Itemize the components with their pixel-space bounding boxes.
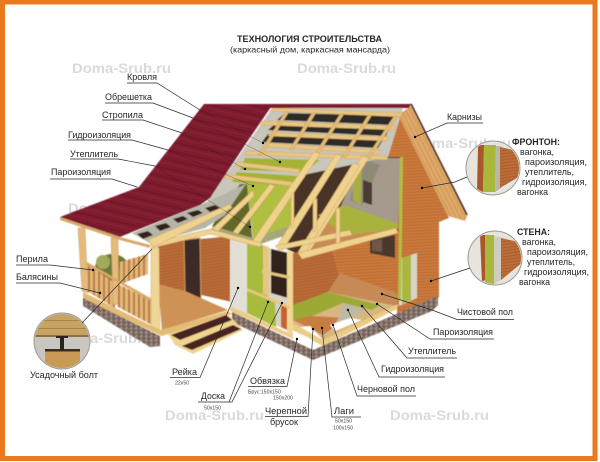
watermarks: Doma-Srub.ru: [68, 200, 167, 216]
label: Доска: [198, 301, 283, 412]
watermarks: Doma-Srub.ru: [297, 60, 396, 76]
text: Фронтон: вагонка: [517, 187, 548, 197]
text: Стена: СТЕНА:: [517, 227, 550, 237]
room walls: [293, 231, 397, 308]
label: Рейка: Рейка: [172, 367, 197, 377]
label: Лаги: Лаги: [334, 406, 354, 416]
label: Гидроизоляция: Гидроизоляция: [68, 130, 131, 140]
steps: [168, 314, 243, 354]
watermarks: Doma-Srub.ru: [390, 407, 489, 423]
lower dark openings: [137, 205, 220, 239]
green insulation under roof: [210, 158, 320, 246]
left column: [78, 228, 88, 293]
label: Пароизоляция пола: [376, 303, 494, 339]
roof membrane upper: [208, 107, 403, 246]
upper rafters: [258, 112, 398, 158]
label: Рейка: [170, 287, 239, 386]
text: Фронтон: [512, 137, 587, 197]
label: Обвязка: Брус:150x150: [248, 390, 281, 396]
inset: wall section circle: [468, 231, 523, 285]
watermarks: Doma-Srub.ru: [72, 60, 171, 76]
front railing: [118, 284, 152, 325]
label: Гидроизоляция пола: [347, 309, 445, 377]
text: Фронтон: пароизоляция,: [525, 157, 587, 167]
wall leader: [430, 268, 470, 282]
label: Карнизы: Карнизы: [447, 112, 482, 122]
side wall door with insulation: [399, 253, 417, 306]
text: Стена: гидроизоляция,: [524, 267, 589, 277]
text: Стена: [517, 227, 589, 287]
floor layers: [293, 292, 397, 346]
front column: [151, 248, 160, 330]
label: Стропила: Стропила: [102, 110, 143, 120]
label: Черепной брусок: брусок: [270, 417, 298, 427]
house illustration: [60, 104, 467, 360]
room floor: [328, 273, 397, 308]
gable leader: [421, 177, 467, 189]
label: Обвязка: [248, 338, 298, 402]
title: [230, 34, 390, 54]
text: Фронтон: ФРОНТОН:: [512, 137, 560, 147]
porch door: [184, 238, 201, 299]
label: Утеплитель: Утеплитель: [70, 149, 118, 159]
trusses: [148, 152, 398, 259]
label: Гидроизоляция пола: Гидроизоляция: [381, 364, 444, 374]
inset: gable section circle: [466, 141, 522, 195]
roof trim gable: [398, 106, 467, 221]
label: Доска: Доска: [201, 391, 225, 401]
label: Балясины: [16, 272, 101, 294]
label: Пароизоляция: [50, 167, 137, 187]
label: Обрешетка: Обрешетка: [105, 92, 152, 102]
label: Обвязка: 150x200: [273, 396, 293, 402]
gable wall: [388, 118, 449, 316]
label: Гидроизоляция: [68, 130, 254, 187]
label: Карнизы: [414, 112, 483, 138]
foundation: [83, 296, 438, 360]
label: Черепной брусок: [265, 328, 314, 427]
watermarks: Doma-Srub.ru: [165, 407, 264, 423]
label: Обвязка: Обвязка: [250, 376, 285, 386]
text: Фронтон: вагонка,: [520, 147, 554, 157]
label: Кровля: [127, 72, 264, 144]
label: Обрешетка: [105, 92, 281, 163]
label: Перила: [16, 254, 94, 271]
upper attic interior: [280, 157, 401, 255]
middle column: [111, 238, 119, 305]
text: Стена: вагонка,: [522, 237, 556, 247]
left railing: [87, 264, 115, 308]
label: Усадочный болт: Усадочный болт: [30, 370, 98, 380]
label: Кровля: Кровля: [127, 72, 157, 82]
label: Утеплитель пола: [361, 305, 457, 358]
bolt leader: [82, 249, 152, 323]
text: Стена: утеплитель,: [527, 257, 575, 267]
label: Лаги: [321, 327, 361, 432]
label: Черновой пол: Черновой пол: [357, 384, 415, 394]
label: Пароизоляция: Пароизоляция: [51, 167, 111, 177]
battens: [224, 108, 403, 186]
label: Утеплитель пола: Утеплитель: [408, 346, 456, 356]
text: Фронтон: гидроизоляция,: [522, 177, 587, 187]
section wall: insulation and frame: [230, 238, 293, 339]
railing top rail: [87, 262, 152, 302]
porch back wall: [158, 236, 232, 302]
watermarks: Doma-Srub.ru: [412, 135, 511, 151]
inset: shrinkage bolt circle: [34, 312, 90, 370]
porch eaves board: [60, 217, 150, 248]
label: Черепной брусок: Черепной: [265, 406, 307, 416]
label: Стропила: [102, 110, 246, 170]
text: Стена: вагонка: [519, 277, 550, 287]
roof right edge: [411, 104, 467, 215]
back railing: [120, 254, 148, 284]
roof ridge: [270, 104, 411, 108]
watermarks: Doma-Srub.ru: [57, 330, 156, 346]
text: Стена: пароизоляция,: [527, 247, 588, 257]
label: Перила: Перила: [16, 254, 48, 264]
porch floor: [158, 284, 228, 330]
label: Чистовой пол: Чистовой пол: [457, 307, 513, 317]
roof dark openings: [262, 113, 396, 148]
bush: [95, 254, 131, 283]
label: Черновой пол: [332, 324, 416, 396]
watermarks: [57, 60, 511, 423]
label: Лаги: 100x150: [333, 426, 353, 432]
roof red: [60, 104, 273, 237]
label: Балясины: Балясины: [16, 272, 58, 282]
roof lower membrane: [132, 184, 246, 243]
title: (каркасный дом, каркасная мансарда): [230, 44, 390, 54]
label: Чистовой пол: [381, 293, 514, 320]
porch sill: [83, 292, 232, 336]
text: Фронтон: утеплитель,: [525, 167, 574, 177]
label: Пароизоляция пола: Пароизоляция: [433, 327, 493, 337]
label: Лаги: 50x150: [335, 418, 352, 424]
room floor frame: [293, 304, 398, 346]
title: ТЕХНОЛОГИЯ СТРОИТЕЛЬСТВА: [237, 34, 382, 44]
label: Доска: 50x150: [204, 406, 221, 412]
green edge of section: [398, 157, 403, 300]
label: Рейка: 22x50: [175, 380, 189, 386]
label: Утеплитель: [70, 149, 251, 228]
